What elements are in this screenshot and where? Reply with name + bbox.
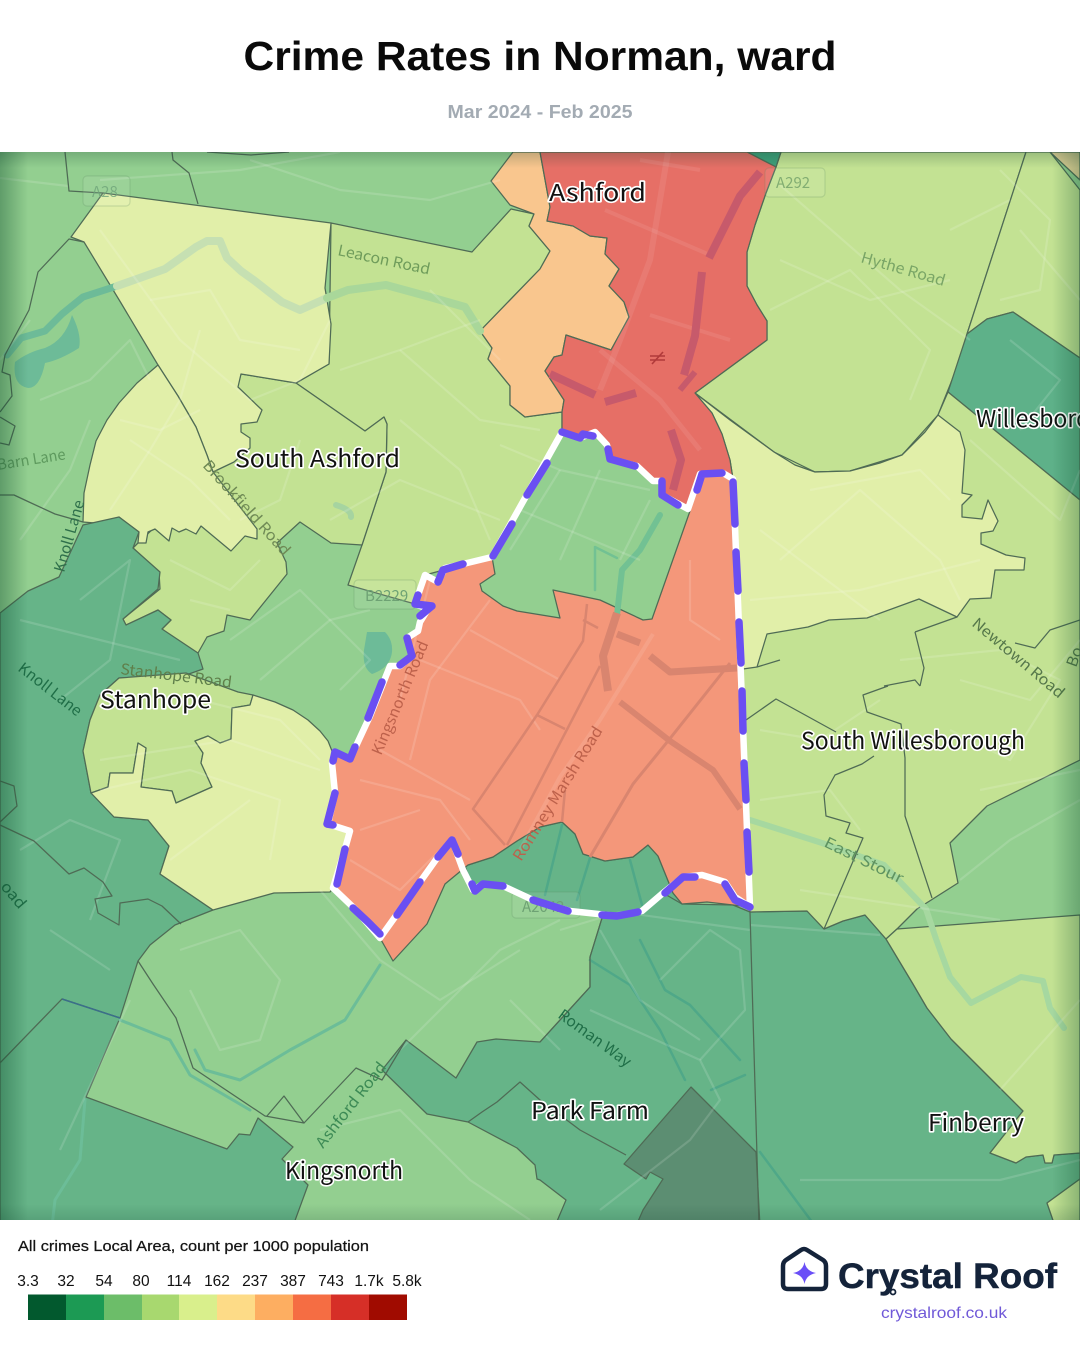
wordmark: Crystal Roof (838, 1257, 1057, 1296)
areas: crime rate bands (0, 152, 1080, 1226)
road labels: Hythe Road (859, 247, 948, 291)
map edge fade (0, 152, 1080, 1220)
road shields (83, 168, 825, 918)
place labels: Finberry (928, 1104, 1024, 1138)
place labels: Kingsnorth (285, 1152, 403, 1186)
road labels: Knoll Lane (49, 497, 89, 574)
legend tick labels: 1.7k (354, 1273, 384, 1290)
legend colour scale (28, 1294, 407, 1320)
legend tick labels: 387 (280, 1273, 306, 1290)
legend (17, 1238, 422, 1320)
road labels: Brookfield Road (198, 455, 296, 560)
road labels: B2229 (365, 585, 408, 606)
legend title: All crimes Local Area, count per 1000 population (18, 1238, 369, 1255)
place labels: Park Farm (531, 1092, 649, 1126)
icon: railway station (650, 352, 665, 364)
website: crystalroof.co.uk (881, 1305, 1008, 1322)
subtitle: date range: Mar 2024 - Feb 2025 (448, 102, 632, 122)
icon: house with star (783, 1249, 826, 1289)
ward outline white line (328, 432, 750, 938)
road labels: Leacon Road (336, 239, 432, 279)
choropleth map (0, 152, 1080, 1226)
legend tick labels: 237 (242, 1273, 268, 1290)
streets on green and yellow areas (0, 152, 1080, 1220)
major streets in town centre (550, 172, 760, 490)
place labels: South Willesborough (801, 722, 1025, 756)
place labels: Stanhope (100, 681, 211, 715)
road labels: Roman Way (554, 1004, 636, 1072)
legend tick labels (17, 1273, 422, 1290)
ward outline purple dashes (327, 432, 750, 934)
ward outline: Norman (327, 432, 750, 938)
road labels: Kingsnorth Road (366, 637, 433, 758)
legend tick labels: 3.3 (17, 1273, 39, 1290)
legend tick labels: 5.8k (392, 1273, 422, 1290)
road labels: Romney Marsh Road (507, 722, 607, 865)
road labels: Stanhope Road (119, 658, 233, 693)
road labels (0, 172, 1080, 1152)
legend tick labels: 114 (167, 1273, 192, 1290)
place labels (100, 174, 1080, 1186)
road labels: Knoll Lane (14, 657, 87, 721)
title: Crime Rates in Norman, ward (244, 33, 836, 79)
legend tick labels: 80 (132, 1273, 150, 1290)
road labels: Ashford Road (310, 1057, 391, 1152)
legend tick labels: 54 (95, 1273, 113, 1290)
rivers and lake (7, 241, 1064, 1226)
place labels: South Ashford (235, 440, 400, 474)
extra area boundaries (0, 152, 1080, 1226)
legend tick labels: 162 (204, 1273, 230, 1290)
logo: Crystal Roof (783, 1249, 1057, 1322)
road labels: Newtown Road (968, 613, 1069, 703)
place labels: Ashford (549, 174, 646, 208)
lakes (15, 315, 392, 674)
legend tick labels: 743 (318, 1273, 344, 1290)
road labels: A28 (92, 181, 118, 202)
road labels: A2042 (522, 896, 564, 917)
legend tick labels: 32 (57, 1273, 75, 1290)
major streets in ward (473, 604, 740, 857)
road labels: A292 (776, 172, 810, 193)
road labels: East Stour (821, 832, 908, 888)
